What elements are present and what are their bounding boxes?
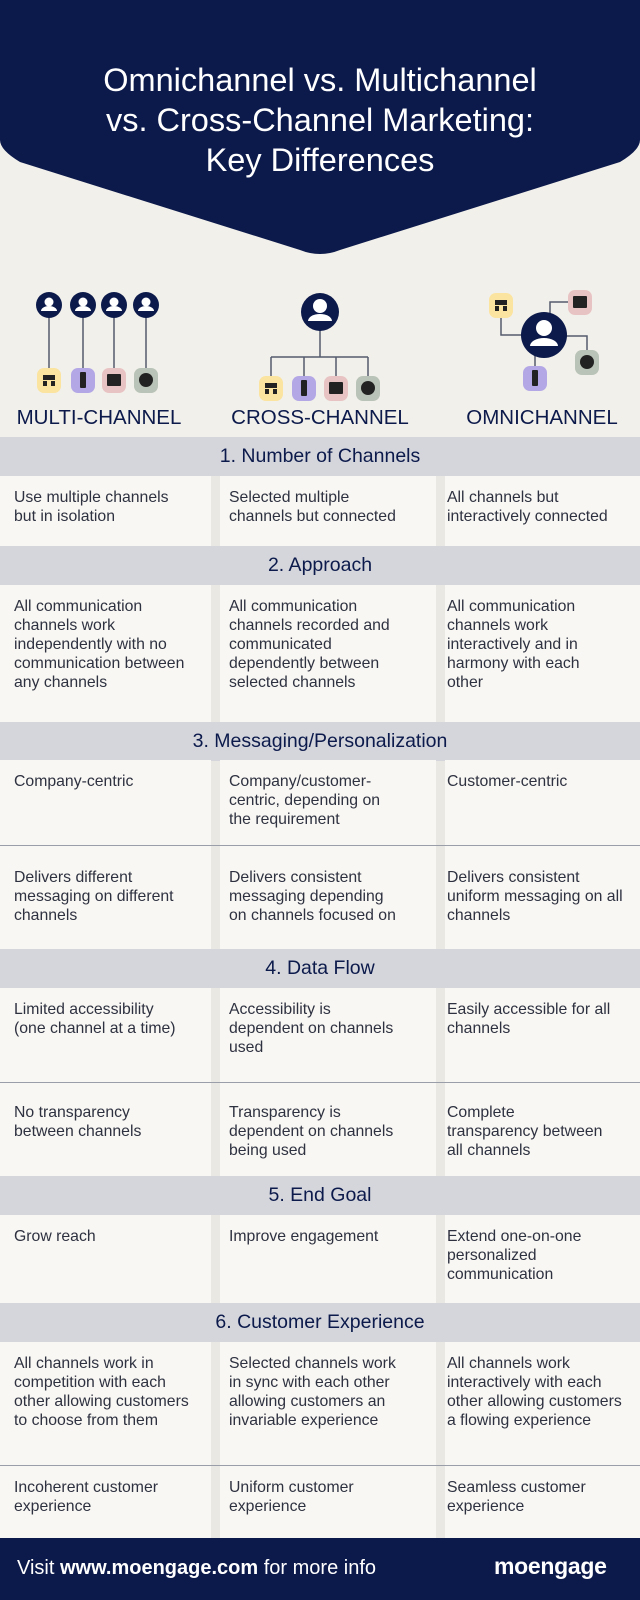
row: experience b: Seamless customer [447, 1479, 586, 1496]
row: experience a: competition with each [14, 1374, 166, 1391]
row: approach: interactively and in [447, 636, 578, 653]
row: data flow a: Limited accessibility [14, 1001, 154, 1018]
footer [0, 1538, 640, 1600]
row: approach: All communication [229, 598, 357, 615]
row: data flow b: transparency between [447, 1123, 602, 1140]
row: messaging b: channels [14, 907, 77, 924]
row: experience a: All channels work in [14, 1355, 154, 1372]
row: approach: communication between [14, 655, 184, 672]
row: experience b: experience [14, 1498, 91, 1515]
section 6 heading: 6. Customer Experience [215, 1311, 425, 1333]
row: data flow b: Complete [447, 1104, 515, 1121]
title: vs. Cross-Channel Marketing: [106, 102, 534, 138]
row: experience a: other allowing customers [447, 1393, 622, 1410]
section 3 heading [0, 722, 640, 761]
row: experience b: experience [229, 1498, 306, 1515]
row: messaging b [0, 846, 640, 949]
title [103, 62, 537, 178]
row: number of channels: but in isolation [14, 508, 115, 525]
row: number of channels: channels but connected [229, 508, 396, 525]
row: data flow b: dependent on channels [229, 1123, 393, 1140]
row: data flow b: being used [229, 1142, 306, 1159]
row: approach: channels work [14, 617, 115, 634]
row: approach: selected channels [229, 674, 355, 691]
row: experience a: other allowing customers [14, 1393, 189, 1410]
row: messaging a: the requirement [229, 811, 340, 828]
row: messaging b: Delivers different [14, 869, 132, 886]
row: approach: channels recorded and [229, 617, 390, 634]
row: experience a: All channels work [447, 1355, 570, 1372]
row: experience a [0, 1342, 640, 1465]
section 2 heading [0, 546, 640, 585]
row: experience a: allowing customers an [229, 1393, 385, 1410]
row: approach: independently with no [14, 636, 167, 653]
row: messaging b: uniform messaging on all [447, 888, 623, 905]
section 4 heading [0, 949, 640, 988]
row: end goal: Grow reach [14, 1228, 96, 1245]
row: experience a: in sync with each other [229, 1374, 390, 1391]
row: messaging b: channels [447, 907, 510, 924]
row: data flow a [0, 988, 640, 1082]
section 1 heading [0, 437, 640, 476]
row: messaging b: messaging on different [14, 888, 174, 905]
row: data flow b: all channels [447, 1142, 530, 1159]
header banner [0, 0, 640, 254]
row: messaging b: Delivers consistent [447, 869, 580, 886]
label: omnichannel: OMNICHANNEL [466, 406, 618, 429]
row: approach: communicated [229, 636, 332, 653]
row: messaging a: Company/customer- [229, 773, 371, 790]
section 5 heading: 5. End Goal [268, 1184, 371, 1206]
title: Key Differences [206, 142, 434, 178]
row: data flow a: dependent on channels [229, 1020, 393, 1037]
row: number of channels: Use multiple channels [14, 489, 169, 506]
section 3 heading: 3. Messaging/Personalization [193, 730, 447, 752]
row: experience b: Incoherent customer [14, 1479, 158, 1496]
row: experience b [0, 1466, 640, 1538]
row: messaging a: centric, depending on [229, 792, 380, 809]
row: messaging a: Customer-centric [447, 773, 567, 790]
footer text: Visit www.moengage.com for more info [17, 1557, 376, 1579]
row: experience a: interactively with each [447, 1374, 602, 1391]
row: messaging b: messaging depending [229, 888, 384, 905]
row: end goal: Extend one-on-one [447, 1228, 581, 1245]
section 1 heading: 1. Number of Channels [220, 445, 420, 467]
row: approach: All communication [14, 598, 142, 615]
row: data flow b: No transparency [14, 1104, 130, 1121]
row: messaging b: on channels focused on [229, 907, 396, 924]
row: data flow a: Easily accessible for all [447, 1001, 610, 1018]
row: data flow b: Transparency is [229, 1104, 341, 1121]
row: data flow a: Accessibility is [229, 1001, 331, 1018]
label: multi-channel: MULTI-CHANNEL [17, 406, 181, 429]
row: messaging a [0, 760, 640, 845]
section 4 heading: 4. Data Flow [265, 957, 375, 979]
section 6 heading [0, 1303, 640, 1342]
gutters [0, 437, 640, 1538]
row: data flow b [0, 1083, 640, 1176]
row: data flow a: used [229, 1039, 263, 1056]
row: end goal: communication [447, 1266, 553, 1283]
row: experience b: experience [447, 1498, 524, 1515]
row: approach: All communication [447, 598, 575, 615]
row: data flow a: (one channel at a time) [14, 1020, 176, 1037]
row: experience a: a flowing experience [447, 1412, 591, 1429]
row: approach: harmony with each [447, 655, 580, 672]
label: cross-channel: CROSS-CHANNEL [231, 406, 409, 429]
row: number of channels: Selected multiple [229, 489, 349, 506]
title: Omnichannel vs. Multichannel [103, 62, 537, 98]
row: data flow b: between channels [14, 1123, 141, 1140]
row: experience a: to choose from them [14, 1412, 158, 1429]
row: data flow a: channels [447, 1020, 510, 1037]
section 5 heading [0, 1176, 640, 1215]
logo: moengage [494, 1553, 607, 1579]
row: approach: channels work [447, 617, 548, 634]
row: experience b: Uniform customer [229, 1479, 354, 1496]
row: number of channels: interactively connected [447, 508, 608, 525]
row: number of channels [0, 476, 640, 546]
row: end goal [0, 1215, 640, 1303]
row: messaging a: Company-centric [14, 773, 133, 790]
row: approach [0, 585, 640, 722]
icon group: connectors [49, 302, 587, 378]
row: messaging b: Delivers consistent [229, 869, 362, 886]
row: number of channels: All channels but [447, 489, 559, 506]
row: approach: dependently between [229, 655, 379, 672]
row: approach: any channels [14, 674, 107, 691]
section 2 heading: 2. Approach [268, 554, 372, 576]
row: end goal: personalized [447, 1247, 537, 1264]
row: experience a: Selected channels work [229, 1355, 396, 1372]
illustrations [36, 290, 599, 401]
row: experience a: invariable experience [229, 1412, 378, 1429]
row: approach: other [447, 674, 483, 691]
row: end goal: Improve engagement [229, 1228, 378, 1245]
